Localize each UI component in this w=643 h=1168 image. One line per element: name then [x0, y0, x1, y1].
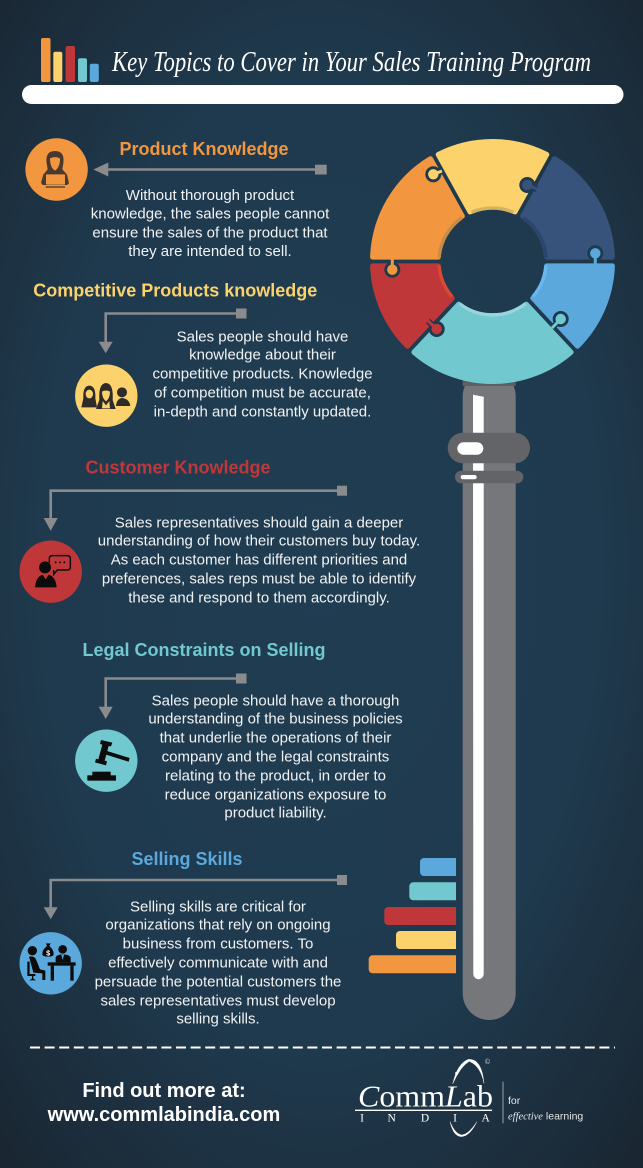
heading: Selling Skills	[131, 849, 243, 869]
body text: ensure the sales of the product that	[92, 224, 328, 241]
body text: knowledge about their	[189, 346, 336, 363]
arrow	[99, 308, 246, 353]
body text: that underlie the operations of their	[160, 729, 391, 746]
puzzle tab: orange	[384, 258, 400, 278]
body text: relating to the product, in order to	[165, 767, 386, 784]
body text: Sales people should have	[177, 328, 348, 345]
body text: company and the legal constraints	[162, 748, 389, 765]
CommLab India logo: effective learning	[508, 1110, 583, 1122]
ring segment: teal	[414, 304, 571, 382]
puzzle ring	[373, 142, 612, 382]
title logo: coloured bars	[41, 38, 99, 82]
icon: three people	[75, 364, 138, 427]
puzzle tab: blue	[587, 245, 603, 265]
footer call to action	[47, 1080, 280, 1126]
heading: Product Knowledge	[119, 139, 289, 159]
body text: Selling skills are critical for	[130, 898, 306, 915]
CommLab India logo: CommLab	[358, 1078, 493, 1114]
footer call to action: Find out more at:	[82, 1080, 246, 1102]
heading: Legal Constraints on Selling	[82, 640, 326, 660]
handle collar small	[455, 471, 523, 483]
ring segment: navy	[523, 159, 612, 258]
body text: they are intended to sell.	[128, 243, 292, 260]
body text: Sales people should have a thorough	[152, 692, 399, 709]
body text: of competition must be accurate,	[154, 384, 371, 401]
key teeth bars	[369, 858, 456, 973]
ring segment: orange	[373, 159, 462, 258]
body text: knowledge, the sales people cannot	[91, 205, 330, 222]
body text	[98, 514, 420, 606]
body text: Sales representatives should gain a deeper	[115, 514, 403, 531]
footer call to action: www.commlabindia.com	[47, 1104, 280, 1126]
CommLab India logo: A	[482, 1113, 491, 1125]
key handle	[448, 370, 530, 1020]
puzzle tab: red	[427, 320, 445, 337]
body text: selling skills.	[176, 1010, 260, 1027]
body text: competitive products. Knowledge	[152, 365, 373, 382]
CommLab India logo: D	[421, 1113, 429, 1125]
icon: sales meeting with money bag: $	[46, 948, 50, 957]
section: Product Knowledge	[25, 138, 330, 260]
ring segment: yellow	[438, 142, 547, 212]
body text: reduce organizations exposure to	[165, 786, 386, 803]
body text: effectively communicate with and	[108, 954, 328, 971]
body text	[91, 187, 330, 260]
heading: Competitive Products knowledge	[33, 281, 317, 301]
ring segment: blue	[533, 265, 612, 346]
body text: Without thorough product	[126, 187, 295, 204]
body text: understanding of how their customers buy today.	[98, 532, 420, 549]
icon: gavel	[75, 730, 138, 792]
heading: Customer Knowledge	[85, 457, 271, 477]
body text: persuade the potential customers the	[95, 973, 341, 990]
body text: organizations that rely on ongoing	[105, 916, 331, 933]
arrow	[93, 162, 327, 176]
icon: sales meeting with money bag	[20, 932, 82, 994]
body text: product liability.	[224, 804, 327, 821]
body text	[152, 328, 373, 420]
section: Selling Skills	[20, 849, 347, 1027]
section: Competitive Products knowledge	[33, 281, 373, 427]
CommLab India logo: N	[388, 1113, 397, 1125]
CommLab India logo: I	[360, 1113, 364, 1125]
CommLab India logo: I	[453, 1113, 457, 1125]
section: Customer Knowledge	[20, 457, 420, 606]
arrow	[44, 486, 347, 531]
puzzle tab: teal	[552, 311, 569, 328]
body text: preferences, sales reps must be able to identify	[102, 570, 417, 587]
body text	[148, 692, 403, 821]
body text	[95, 898, 341, 1027]
icon: person with speech bubble	[20, 540, 82, 603]
puzzle tab: yellow	[425, 166, 442, 182]
CommLab India logo: for	[508, 1095, 521, 1107]
body text: As each customer has different priorities and	[111, 551, 407, 568]
CommLab India logo	[355, 1058, 583, 1137]
arrow	[99, 674, 246, 719]
body text: in-depth and constantly updated.	[154, 403, 371, 420]
body text: understanding of the business policies	[148, 710, 403, 727]
handle collar large	[448, 433, 530, 463]
section: Legal Constraints on Selling	[75, 640, 403, 821]
body text: business from customers. To	[123, 935, 313, 952]
body text: these and respond to them accordingly.	[128, 589, 390, 606]
body text: sales representatives must develop	[100, 992, 336, 1009]
arrow	[44, 875, 347, 919]
title white bar	[22, 85, 624, 104]
icon: woman with laptop	[25, 138, 88, 201]
ring segment: red	[373, 265, 452, 346]
CommLab India logo: ©	[485, 1058, 491, 1066]
puzzle tab: navy	[519, 177, 537, 193]
